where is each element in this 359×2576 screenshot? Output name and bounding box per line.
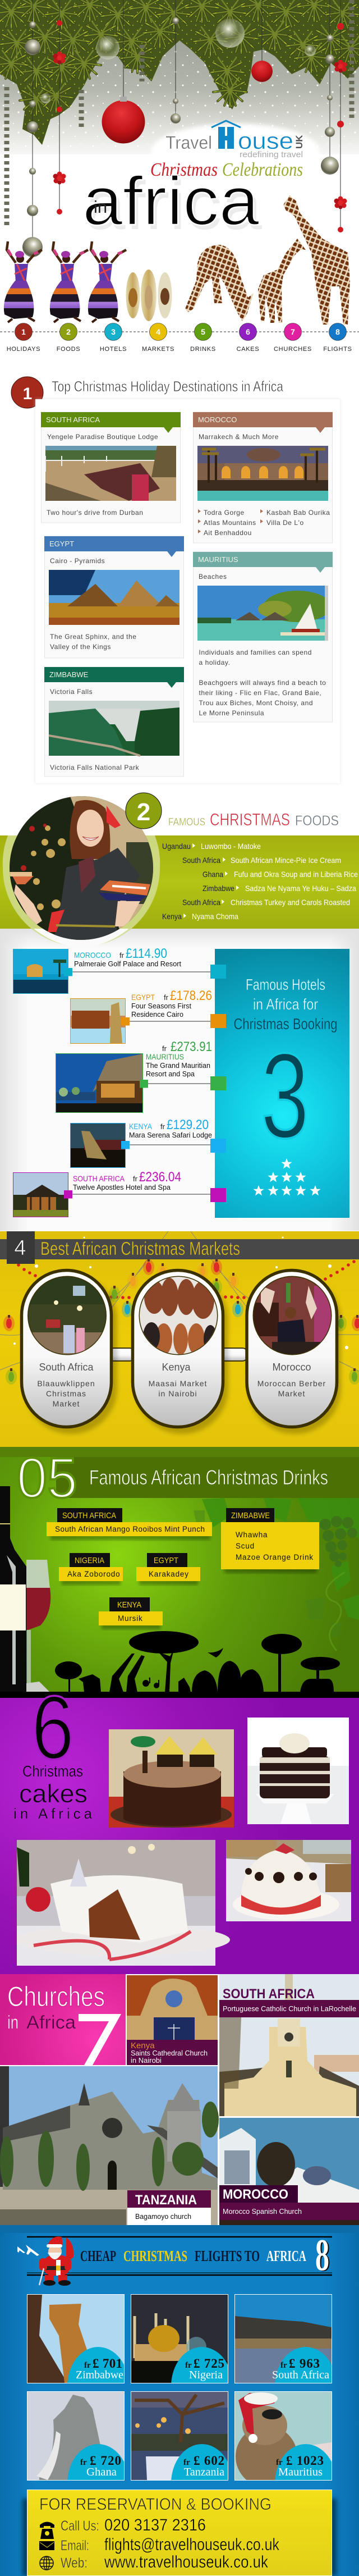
title: Christmas Celebrations bbox=[150, 159, 303, 180]
tile: South Africa: £ 963 bbox=[289, 2356, 320, 2371]
timeline navigation: 5 bbox=[201, 327, 205, 336]
heading: CHRISTMAS bbox=[123, 2248, 187, 2264]
heading: Christmas bbox=[22, 1762, 83, 1780]
tag: Zimbabwe: Whawha bbox=[236, 1531, 268, 1539]
heading bbox=[17, 1447, 328, 1510]
heading block: in bbox=[7, 2012, 19, 2033]
tile: Mauritius: £ 1023 bbox=[286, 2454, 324, 2468]
heading: 8 bbox=[316, 2231, 330, 2281]
church: Tanzania: TANZANIA bbox=[135, 2193, 197, 2208]
card: Morocco bbox=[193, 412, 333, 543]
timeline navigation: MARKETS bbox=[142, 346, 174, 353]
panel: famous hotels sidebar bbox=[215, 949, 349, 1218]
hotel: Egypt: Residence Cairo bbox=[131, 1010, 183, 1018]
timeline navigation: CHURCHES bbox=[274, 346, 312, 353]
stars bbox=[253, 1158, 321, 1195]
santa bbox=[39, 2236, 73, 2286]
heading block bbox=[0, 1974, 126, 2065]
market: South Africa bbox=[21, 1270, 117, 1434]
market: Morocco: Morocco bbox=[272, 1362, 311, 1373]
tile: Ghana: £ 720 bbox=[90, 2454, 121, 2468]
tag: Zimbabwe: Mazoe Orange Drink bbox=[236, 1553, 314, 1561]
church: South Africa bbox=[219, 1974, 359, 2116]
tile: Tanzania: £ 602 bbox=[194, 2454, 224, 2468]
heading: cakes bbox=[19, 1779, 88, 1808]
market: South Africa: Christmas bbox=[46, 1389, 86, 1398]
panel: famous hotels sidebar: Famous Hotels bbox=[246, 976, 325, 993]
title: Christmas Celebrations: Christmas bbox=[150, 159, 218, 180]
dancers bbox=[4, 241, 126, 322]
tile: Nigeria: fr bbox=[185, 2361, 192, 2370]
tile: Ghana bbox=[27, 2391, 125, 2481]
header bar bbox=[0, 1231, 359, 1264]
market: Kenya: Maasai Market bbox=[149, 1379, 207, 1388]
list of foods: Ugandau bbox=[162, 842, 191, 851]
list of foods: Nyama Choma bbox=[192, 912, 238, 921]
heading: section 1 bbox=[11, 377, 283, 408]
panel: cheap flights bbox=[0, 2225, 359, 2576]
panel: header with christmas garland bbox=[0, 0, 359, 257]
heading: section 1: Top Christmas Holiday Destinations in Africa bbox=[52, 378, 283, 395]
silver baubles bbox=[22, 17, 339, 257]
hotel: South Africa: SOUTH AFRICA bbox=[73, 1174, 125, 1183]
list of foods bbox=[162, 842, 358, 921]
vine and grapes bbox=[194, 1498, 359, 1651]
panel: reservation and booking: Web: bbox=[61, 2555, 88, 2571]
card: Egypt: Valley of the Kings bbox=[50, 643, 111, 651]
church: Tanzania bbox=[0, 2066, 219, 2225]
card: Morocco: Villa De L'o bbox=[266, 519, 304, 527]
card: Morocco: Marrakech & Much More bbox=[199, 433, 279, 441]
tag: Zimbabwe: ZIMBABWE bbox=[231, 1511, 270, 1520]
hotel: South Africa: fr bbox=[133, 1175, 138, 1183]
card: Egypt: Cairo - Pyramids bbox=[50, 557, 105, 565]
hotel: Mauritius: The Grand Mauritian bbox=[146, 1061, 210, 1070]
card: Morocco: MOROCCO bbox=[198, 415, 237, 424]
header bar: 4 bbox=[14, 1236, 26, 1260]
card: Zimbabwe: Victoria Falls bbox=[50, 688, 93, 696]
hotel: Kenya: £129.20 bbox=[167, 1117, 209, 1132]
tile: Zimbabwe bbox=[27, 2294, 125, 2383]
timeline navigation: FLIGHTS bbox=[323, 346, 352, 353]
market: South Africa: Market bbox=[53, 1399, 80, 1408]
panel: Christmas markets bbox=[0, 1231, 359, 1447]
cake: strawberry dome bbox=[226, 1840, 351, 1921]
foliage garland bbox=[0, 0, 359, 145]
tag: Kenya: KENYA bbox=[117, 1600, 141, 1610]
panel: famous drinks bbox=[0, 1447, 359, 1698]
panel: Christmas cakes bbox=[0, 1677, 359, 1974]
hotel: Morocco: MOROCCO bbox=[74, 951, 111, 960]
header bar: Best African Christmas Markets bbox=[40, 1238, 240, 1259]
heading: FLIGHTS TO bbox=[195, 2248, 260, 2264]
hotel: Egypt bbox=[71, 988, 226, 1043]
hotel: South Africa: Twelve Apostles Hotel and Spa bbox=[73, 1183, 171, 1191]
card: Mauritius: their liking - Flic en Flac, Grand Baie, bbox=[199, 689, 321, 697]
card: Morocco: Kasbah Bab Ourika bbox=[266, 509, 330, 517]
logo: Travel House UK: ouse bbox=[238, 127, 293, 154]
heading: in Africa bbox=[13, 1805, 93, 1822]
icon: globe bbox=[40, 2556, 53, 2570]
cake: layered chocolate bbox=[247, 1718, 349, 1824]
list of foods: Zimbabwe bbox=[202, 884, 234, 893]
title: in africa: in bbox=[94, 197, 107, 217]
hotel: Egypt: fr bbox=[164, 993, 169, 1002]
hotel: Egypt: £178.26 bbox=[170, 988, 212, 1003]
church: Kenya: in Nairobi bbox=[131, 2056, 162, 2065]
badge 2: 2 bbox=[137, 798, 150, 826]
market: South Africa: South Africa bbox=[39, 1362, 94, 1373]
tag: Egypt: Karakadey bbox=[149, 1570, 189, 1578]
tag: South Africa: South African Mango Rooibos Mint Punch bbox=[55, 1525, 205, 1533]
panel: destinations bbox=[35, 399, 340, 783]
hotel: Morocco bbox=[13, 946, 226, 994]
church: Kenya bbox=[127, 1975, 218, 2065]
timeline navigation: HOLIDAYS bbox=[7, 346, 40, 353]
list of foods: Ghana bbox=[202, 870, 223, 879]
card: Mauritius: Beaches bbox=[199, 573, 227, 581]
tile: Tanzania: Tanzania bbox=[184, 2466, 224, 2478]
list of foods: Luwombo - Matoke bbox=[201, 842, 261, 851]
timeline navigation: 6 bbox=[246, 327, 250, 336]
list of foods: South Africa bbox=[182, 856, 220, 865]
market: Kenya: Kenya bbox=[162, 1362, 191, 1373]
tag: Nigeria bbox=[59, 1553, 123, 1585]
tag: South Africa bbox=[47, 1508, 212, 1540]
timeline navigation: 4 bbox=[156, 327, 160, 336]
cake: fruit cake bbox=[17, 1840, 230, 1966]
heading: 6 bbox=[31, 1677, 74, 1778]
panel: reservation and booking: FOR RESERVATION & BOOKING bbox=[39, 2495, 271, 2514]
heading: foods bbox=[168, 810, 339, 829]
market: Kenya bbox=[132, 1270, 228, 1434]
heading bbox=[80, 2231, 330, 2281]
card: Mauritius: Beachgoers will always find a beach to bbox=[199, 679, 326, 687]
timeline navigation: 7 bbox=[291, 327, 295, 336]
card: Mauritius bbox=[193, 552, 333, 722]
hotel: Mauritius: MAURITIUS bbox=[146, 1052, 184, 1061]
church: Morocco: MOROCCO bbox=[223, 2187, 288, 2202]
hotel: Egypt: Four Seasons First bbox=[131, 1002, 191, 1010]
heading: 8 bbox=[315, 2231, 329, 2280]
timeline navigation: 3 bbox=[111, 327, 116, 336]
timeline navigation: HOTELS bbox=[100, 346, 127, 353]
heading: AFRICA bbox=[266, 2248, 306, 2264]
timeline navigation: FOODS bbox=[57, 346, 80, 353]
red baubles bbox=[53, 20, 347, 232]
card: Egypt: The Great Sphinx, and the bbox=[50, 633, 137, 641]
card: South Africa: Yengele Paradise Boutique Lodge bbox=[47, 433, 158, 441]
wine bottle and glass bbox=[0, 1486, 50, 1692]
church: Kenya: Kenya bbox=[131, 2041, 155, 2050]
card: South Africa bbox=[41, 412, 181, 523]
card: Mauritius: Trou aux Biches, Mont Choisy, and bbox=[199, 699, 313, 707]
market: Morocco: Market bbox=[278, 1389, 305, 1398]
tile: South Africa: fr bbox=[280, 2361, 287, 2370]
hotel: Mauritius bbox=[56, 1039, 226, 1113]
tile: Mauritius bbox=[234, 2391, 332, 2481]
tile: Zimbabwe: £ 701 bbox=[93, 2356, 122, 2371]
tile: Tanzania bbox=[131, 2391, 228, 2481]
heading bbox=[13, 1677, 93, 1822]
hotel: Kenya bbox=[71, 1117, 226, 1168]
photo ring bbox=[3, 835, 160, 947]
timeline navigation: CAKES bbox=[237, 346, 259, 353]
list of foods: South African Mince-Pie Ice Cream bbox=[231, 856, 341, 865]
card: Zimbabwe: Victoria Falls National Park bbox=[50, 764, 140, 771]
heading: 05 bbox=[17, 1447, 77, 1510]
hotel: Kenya: Mara Serena Safari Lodge bbox=[129, 1131, 212, 1139]
heading: foods: CHRISTMAS bbox=[210, 810, 290, 829]
badge 2 bbox=[126, 793, 162, 829]
logo: Travel House UK: UK bbox=[294, 135, 305, 149]
market: Morocco bbox=[247, 1270, 341, 1434]
heading: CHEAP bbox=[80, 2248, 116, 2264]
market: South Africa: Blaauwklippen bbox=[37, 1379, 95, 1388]
tile: Nigeria: Nigeria bbox=[189, 2369, 223, 2381]
timeline navigation bbox=[0, 323, 359, 353]
card: Morocco: Ait Benhaddou bbox=[204, 529, 252, 537]
icon: phone bbox=[40, 2522, 54, 2539]
list of foods: Kenya bbox=[162, 912, 182, 921]
icon: planes bbox=[17, 2245, 39, 2256]
tile: Zimbabwe: fr bbox=[84, 2361, 91, 2370]
hotel: South Africa: £236.04 bbox=[139, 1170, 181, 1185]
panel: famous hotels sidebar: in Africa for bbox=[253, 995, 318, 1013]
hanging strings bbox=[33, 0, 340, 246]
card: Zimbabwe: ZIMBABWE bbox=[49, 670, 89, 679]
card: South Africa: SOUTH AFRICA bbox=[46, 415, 100, 424]
tag: Egypt: EGYPT bbox=[154, 1556, 178, 1565]
tile: Tanzania: fr bbox=[183, 2458, 190, 2467]
title: Christmas Celebrations: Celebrations bbox=[222, 159, 303, 180]
heading block: Churches bbox=[7, 1981, 105, 2012]
safari silhouettes bbox=[0, 1631, 359, 1698]
tile: South Africa bbox=[234, 2294, 332, 2383]
hotel: Mauritius: Resort and Spa bbox=[146, 1070, 195, 1078]
logo: Travel House UK: Travel bbox=[165, 133, 212, 153]
title: in africa: africa bbox=[85, 167, 262, 244]
hotel: Kenya: fr bbox=[160, 1122, 165, 1131]
panel: reservation and booking: 020 3137 2316 bbox=[104, 2516, 206, 2534]
tile: Mauritius: Mauritius bbox=[278, 2466, 323, 2478]
church: South Africa: Portuguese Catholic Church in LaRochelle bbox=[223, 2004, 356, 2013]
tag: South Africa: SOUTH AFRICA bbox=[62, 1511, 116, 1520]
panel: reservation and booking bbox=[22, 2490, 337, 2576]
hotel: Morocco: fr bbox=[119, 951, 125, 960]
market: Morocco: Moroccan Berber bbox=[257, 1379, 326, 1388]
panel: reservation and booking: Email: bbox=[61, 2538, 89, 2554]
card: Mauritius: MAURITIUS bbox=[198, 555, 238, 564]
heading block: Africa bbox=[26, 2012, 76, 2033]
tile: Nigeria: £ 725 bbox=[194, 2356, 224, 2371]
logo: Travel House UK: redefining travel bbox=[240, 150, 303, 159]
panel: churches bbox=[0, 1974, 359, 2225]
panel: reservation and booking: www.travelhouseuk.co.uk bbox=[104, 2552, 268, 2572]
market: Kenya: in Nairobi bbox=[158, 1389, 197, 1398]
photo: woman with plates bbox=[10, 796, 153, 943]
african masks bbox=[126, 270, 172, 321]
church: South Africa: SOUTH AFRICA bbox=[223, 1986, 315, 2002]
heading: section 1: 1 bbox=[23, 385, 32, 403]
card: South Africa: Two hour's drive from Durban bbox=[47, 509, 143, 517]
hotel: Morocco: Palmeraie Golf Palace and Resort bbox=[74, 960, 181, 968]
hotel: Kenya: KENYA bbox=[129, 1122, 153, 1131]
tile: Mauritius: fr bbox=[276, 2458, 283, 2467]
panel: reservation and booking: flights@travelhouseuk.co.uk bbox=[104, 2534, 279, 2554]
tag: Nigeria: NIGERIA bbox=[75, 1556, 104, 1565]
heading: foods: FOODS bbox=[295, 813, 339, 829]
timeline navigation: 8 bbox=[335, 327, 340, 336]
card: Mauritius: Individuals and families can spend bbox=[199, 648, 312, 656]
card: Mauritius: Le Morne Peninsula bbox=[199, 709, 264, 717]
hotel: Mauritius: fr bbox=[162, 1044, 167, 1053]
tag: Zimbabwe bbox=[221, 1508, 319, 1573]
tile: Nigeria bbox=[131, 2294, 228, 2383]
panel: famous Christmas foods bbox=[0, 793, 359, 1231]
cake: African village bbox=[109, 1729, 234, 1828]
timeline navigation: 1 bbox=[21, 327, 26, 336]
card: Morocco: Todra Gorge bbox=[204, 509, 245, 517]
tag: Kenya bbox=[99, 1597, 163, 1629]
hotel: South Africa bbox=[13, 1170, 226, 1217]
tile: Ghana: Ghana bbox=[86, 2466, 117, 2478]
big number 3: 3 bbox=[261, 1027, 309, 1163]
tile: Zimbabwe: Zimbabwe bbox=[76, 2369, 123, 2381]
hotel: Mauritius: £273.91 bbox=[171, 1039, 212, 1054]
timeline navigation: 2 bbox=[66, 327, 71, 336]
panel: reservation and booking: Call Us: bbox=[61, 2518, 99, 2534]
card: Morocco: Atlas Mountains bbox=[204, 519, 256, 527]
hotel: Morocco: £114.90 bbox=[126, 946, 167, 961]
list of foods: South Africa bbox=[182, 898, 220, 907]
tag: Egypt bbox=[136, 1553, 200, 1585]
card: Mauritius: a holiday. bbox=[199, 659, 230, 666]
heading: foods: FAMOUS bbox=[168, 816, 205, 828]
tag: Zimbabwe: Scud bbox=[236, 1542, 255, 1550]
tag: Kenya: Mursik bbox=[118, 1614, 143, 1623]
card: Egypt: EGYPT bbox=[49, 540, 74, 548]
tag: Nigeria: Aka Zoborodo bbox=[67, 1570, 120, 1578]
church: Tanzania: Bagamoyo church bbox=[135, 2212, 191, 2221]
church: Morocco: Morocco Spanish Church bbox=[223, 2207, 302, 2216]
icon: envelope bbox=[39, 2541, 54, 2550]
connectors bbox=[102, 1348, 248, 1361]
church: Morocco bbox=[219, 2118, 359, 2225]
tile: South Africa: South Africa bbox=[272, 2369, 329, 2381]
church: Kenya: Saints Cathedral Church bbox=[131, 2049, 208, 2057]
string lights bbox=[0, 1231, 359, 1385]
logo: Travel House UK bbox=[165, 121, 305, 159]
timeline navigation: DRINKS bbox=[190, 346, 216, 353]
card: Egypt bbox=[44, 536, 184, 658]
giraffes bbox=[185, 195, 350, 325]
tile: Ghana: fr bbox=[80, 2458, 87, 2467]
bead chains bbox=[7, 0, 352, 227]
hotel: Egypt: EGYPT bbox=[131, 993, 155, 1002]
title: in africa: africa bbox=[82, 163, 259, 239]
card: Zimbabwe bbox=[44, 667, 184, 777]
